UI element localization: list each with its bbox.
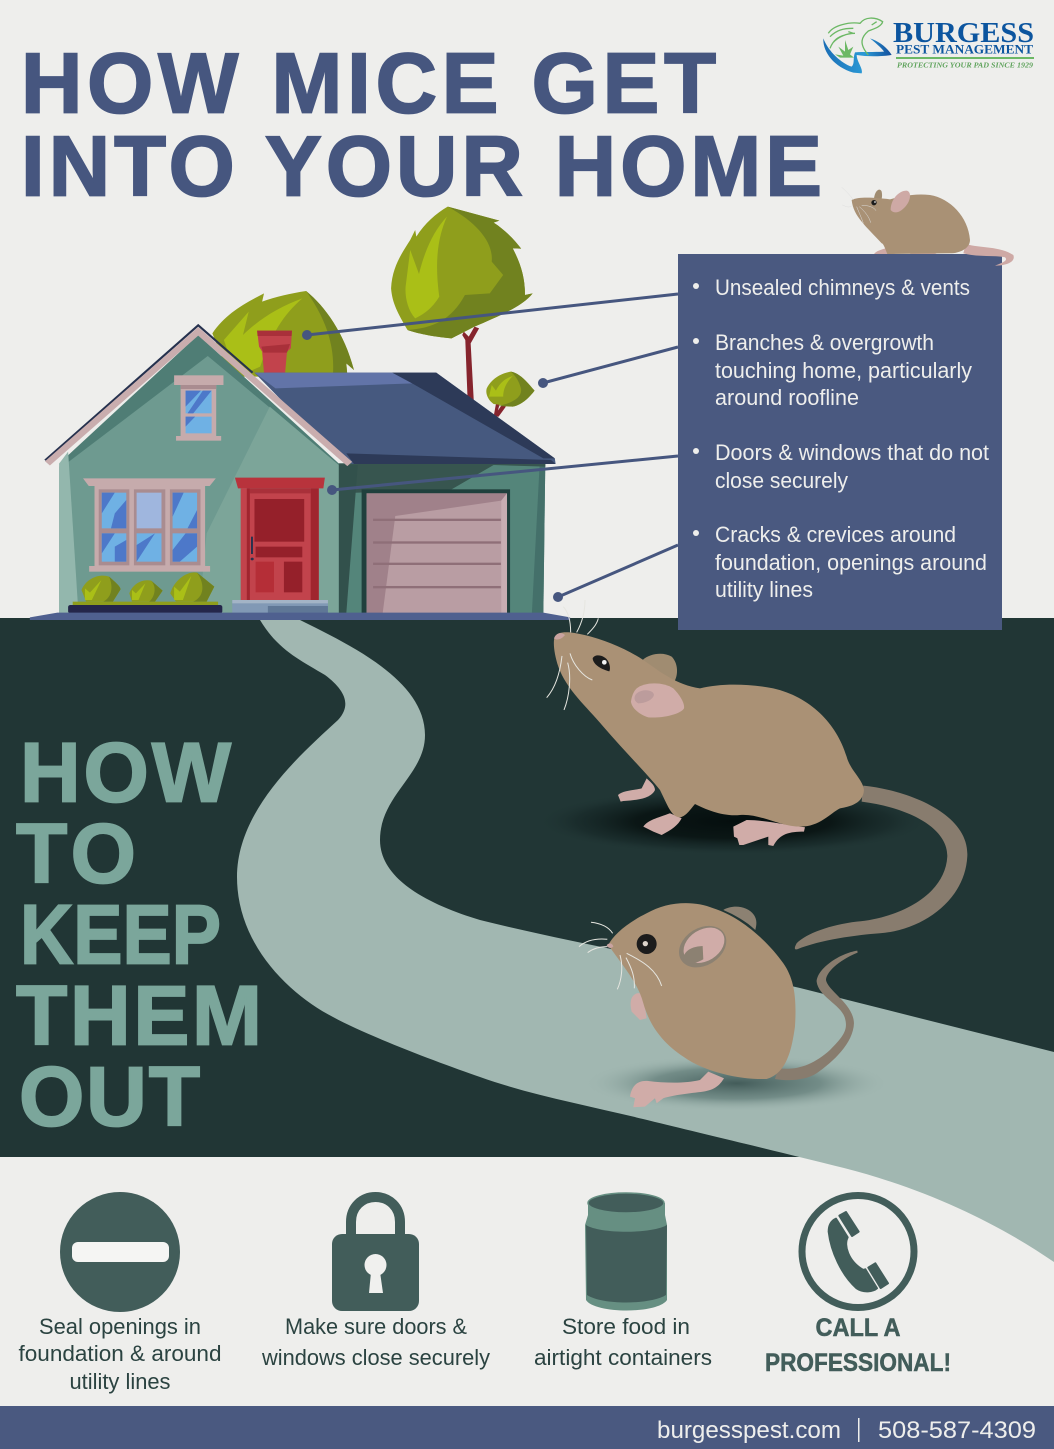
body [852,195,970,254]
bullet: cracks: Cracks & crevices around [715,522,956,547]
bullet: branches: around roofline [715,385,859,410]
logo: Burgess Pest Management: PEST MANAGEMENT [896,42,1033,56]
chimney [257,331,292,373]
nose [554,633,565,639]
logo frog icon [823,18,892,73]
tip text: airtight containers [534,1345,712,1370]
tip text [765,1314,951,1377]
attic window [174,375,223,441]
upper large mouse [537,600,967,949]
nose [607,943,613,948]
tall tree [391,207,533,400]
tip text [18,1314,222,1394]
roof fascia [45,325,350,464]
tip text: Make sure doors & [285,1314,467,1339]
paws [618,778,805,846]
tip: doors and windows [261,1197,491,1370]
front ear [631,683,684,717]
footer contact text: 508-587-4309 [878,1417,1036,1444]
bullet: cracks: utility lines [715,577,813,602]
heading: how to keep them out: THEM [16,968,262,1062]
tip text: PROFESSIONAL! [765,1349,951,1377]
small tree [486,372,535,417]
eye [871,200,877,205]
bullet: doors and windows: Doors & windows that do not [715,440,989,465]
heading: how to keep them out: OUT [19,1050,200,1144]
tip text [534,1314,712,1370]
footer contact text: burgesspest.com [657,1417,841,1444]
icon: padlock [332,1197,419,1311]
footer bar [0,1406,1054,1449]
heading: how to keep them out: TO [16,806,136,900]
icon: telephone [802,1196,914,1308]
tip: seal openings [18,1192,222,1394]
icon: no entry [60,1192,180,1312]
connector lines [302,294,678,602]
tip text: CALL A [816,1314,900,1342]
back ear [643,654,677,682]
heading: how to keep them out: HOW [20,726,232,820]
bullet: doors and windows [693,440,989,493]
logo: Burgess Pest Management [823,17,1034,73]
front door [232,478,328,613]
icon: jar [585,1193,667,1310]
bullet: chimneys: Unsealed chimneys & vents [715,275,970,300]
body [608,903,796,1079]
roof [254,373,556,464]
bullet: doors and windows: close securely [715,468,848,493]
house illustration [30,207,570,620]
eye [593,655,610,671]
tip text [261,1314,491,1370]
floor shadow [537,788,930,855]
connector: door [327,456,678,495]
planter and shrubs [68,572,222,613]
foundation slab [30,613,570,620]
front ear [891,191,910,212]
feet [874,247,937,254]
back ear [723,907,756,930]
lower large mouse [579,903,890,1112]
front gable wall [59,335,339,613]
garage door [362,489,510,613]
garage wall [339,463,545,613]
heading: how mice get into your home: INTO YOUR HOME [21,120,822,214]
heading: how to keep them out: KEEP [20,888,221,982]
bullet: branches: Branches & overgrowth [715,330,934,355]
bullet: branches: touching home, particularly [715,358,972,383]
body [554,632,864,827]
tip text: Seal openings in [39,1314,201,1339]
tip: call a professional [765,1196,951,1377]
winding path [237,620,1054,1262]
tip text: utility lines [70,1369,170,1394]
whiskers [579,922,662,989]
floor shadow [583,1055,890,1112]
connector: branches [538,347,678,388]
whiskers [547,600,598,710]
eye [637,934,657,954]
connector: chimney [302,294,678,340]
footer contact text [657,1417,1036,1444]
list panel [678,254,1002,630]
front window [83,478,216,572]
bullet: branches [693,330,972,410]
logo: Burgess Pest Management: PROTECTING YOUR PAD SINCE 1929 [897,60,1033,70]
back ear [874,190,882,202]
heading: how mice get into your home: HOW MICE GET [21,36,716,132]
tail [775,951,858,1080]
heading: how to keep them out [16,726,262,1144]
bullet: cracks: foundation, openings around [715,550,987,575]
logo: Burgess Pest Management: BURGESS [893,17,1034,49]
paw [630,993,724,1107]
back tree [212,291,354,377]
tip text: foundation & around [18,1341,222,1366]
connector: foundation [553,545,678,602]
heading: how mice get into your home [21,36,822,214]
whiskers [842,187,876,223]
tip text: Store food in [562,1314,690,1339]
tail [795,786,967,949]
bullet: cracks [693,522,987,602]
front ear [671,917,734,976]
mouse on box [842,187,1014,266]
tail [963,244,1014,266]
tip text: windows close securely [261,1345,491,1370]
tip: airtight containers [534,1193,712,1370]
